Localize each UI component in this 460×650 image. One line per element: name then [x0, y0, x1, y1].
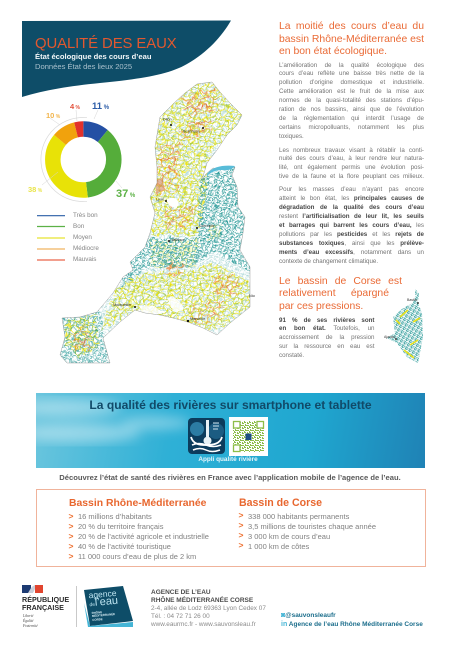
bullet list: > [238, 520, 243, 530]
heading: Rhône-Méditerranée: bassin Rhône-Méditerranée est [279, 34, 424, 45]
address: Tél. : 04 72 71 26 00 [151, 613, 210, 620]
map: Corse: Ajaccio [384, 335, 395, 339]
logo: République Française [22, 585, 69, 628]
logo small text: CORSE [92, 617, 103, 622]
paragraph: main causes: Pour les masses d’eau n’ayant pas encore [279, 186, 424, 193]
paragraph: restoration works: tive de la faune et la flore peuplant ces milieux. [279, 173, 424, 180]
label: 4 percent: 4 % [70, 102, 80, 111]
logo text: del’eau [89, 595, 119, 609]
instagram: ◙@sauvonsleaufr [281, 612, 336, 619]
bullet list: 11 000 cours d’eau de plus de 2 km [78, 552, 196, 561]
legend labels: Mauvais [73, 256, 96, 263]
paragraph: improvement: L’amélioration de la qualité écologique des [279, 62, 424, 68]
icon: Marianne flag [22, 585, 43, 593]
bullet list: 1 000 km de côtes [248, 542, 309, 550]
icon: app [188, 418, 225, 454]
paragraph: restoration works: Les nombreux travaux visant à rétablir la conti- [279, 146, 424, 154]
banner background highlights [36, 396, 192, 446]
paragraph: main causes [279, 186, 424, 265]
divider [76, 586, 77, 627]
linkedin: in Agence de l’eau Rhône Méditerranée Corse [281, 620, 423, 628]
paragraph: main causes: restent l’artificialisation de leur lit, les seuils [279, 213, 424, 220]
column: Rhône-Méditerranée [68, 498, 209, 561]
heading: Corse: par ces pressions. [279, 301, 363, 312]
logo: agence de l'eau [84, 586, 133, 627]
bullet list: 338 000 habitants permanents [248, 512, 349, 520]
map: Rhône-Méditerranée river basin: Besançon [183, 130, 200, 134]
motto [23, 614, 38, 628]
label: 38 percent: 38 % [28, 185, 42, 194]
paragraph: main causes: pollutions par les pesticides et les rejets de [279, 231, 424, 238]
wordmark: FRANÇAISE [22, 603, 64, 612]
label: 11 percent: 11 % [92, 101, 109, 112]
agency name [151, 589, 253, 604]
motto: Liberté [23, 614, 33, 618]
paragraph: main causes: et barrages qui barrent les cours d’eau, les [279, 222, 424, 229]
map: Rhône-Méditerranée river basin: Lyon [156, 198, 164, 202]
legend labels: Très bon [73, 212, 98, 219]
legend labels: Moyen [73, 234, 92, 241]
heading: Corse: Le bassin de Corse est [279, 276, 402, 286]
column: Corse [238, 497, 376, 550]
logo small text: MÉDITERRANÉE [92, 612, 115, 618]
bullet list: 20 % de l’activité agricole et industrielle [78, 532, 209, 541]
map: Rhône-Méditerranée river basin: Montpellier [113, 303, 132, 307]
paragraph: improvement: ration de nos bassins, ainsi que de l’évolution [279, 106, 424, 113]
paragraph: Corse: constaté. [279, 352, 304, 359]
bullet list: > [238, 540, 243, 550]
label: 10 percent: 10 % [46, 110, 60, 120]
legend labels: Bon [73, 223, 84, 230]
agency contact block [151, 589, 266, 628]
bullet list: > [68, 530, 73, 540]
bullet list: > [238, 510, 243, 520]
map: Corse: Bastia [407, 298, 417, 302]
bullet list: > [68, 520, 73, 530]
legend swatches [37, 215, 65, 261]
legend labels [73, 212, 99, 263]
paragraph: Corse [279, 316, 374, 359]
heading: Rhône-Méditerranée [279, 21, 424, 57]
paragraph: improvement: pollution d’origine domestique et industrielle. [279, 79, 424, 86]
key figures panel [36, 489, 426, 567]
logo small text: RHÔNE [92, 610, 102, 615]
paragraph: main causes: substances toxiques, ainsi que les prélève- [279, 240, 424, 247]
heading: Rhône-Méditerranée: La moitié des cours d’eau du [279, 21, 424, 32]
column heading: Bassin de Corse [239, 497, 322, 509]
address: www.eaurmc.fr - www.sauvonsleau.fr [151, 621, 256, 628]
paragraph: improvement: toxiques. [279, 133, 304, 140]
heading: Rhône-Méditerranée: en bon état écologique. [279, 46, 387, 57]
paragraph: improvement: cours d’eau reflète une baisse très nette de la [279, 70, 424, 77]
paragraph: improvement: Cette amélioration est le fruit de la mise aux [279, 88, 424, 95]
paragraph: Corse: sur la ressource en eau est [279, 343, 374, 350]
paragraph: Corse: accroissement de la pression [279, 334, 374, 341]
paragraph: improvement: normes de la quasi-totalité des stations d’épu- [279, 97, 424, 104]
app caption: Appli qualité rivière [198, 456, 258, 463]
address: 2-4, allée de Lodz 69363 Lyon Cedex 07 [151, 605, 266, 612]
bullet list: > [68, 550, 73, 560]
legend [37, 212, 99, 263]
column heading: Bassin Rhône-Méditerranée [69, 498, 206, 509]
bullet list [68, 510, 209, 561]
logo text: agence [88, 588, 117, 600]
paragraph: restoration works: lité, ont également permis une évolution posi- [279, 164, 424, 171]
motto: Fraternité [23, 624, 38, 628]
paragraph: improvement: de la réglementation qui interdit l’usage de [279, 115, 424, 122]
logo shape [84, 586, 133, 627]
paragraph: main causes: ments d’eau excessifs, notamment dans un [279, 249, 424, 256]
subtitle: État écologique des cours d’eau [35, 52, 151, 61]
wordmark: RÉPUBLIQUE [22, 595, 69, 604]
paragraph: main causes: dégradation de la qualité des cours d’eau [279, 204, 424, 211]
paragraph: Corse: en bon état. Toutefois, un [279, 325, 374, 332]
label: 37 percent: 37 % [116, 188, 135, 200]
map: Rhône-Méditerranée river basin: Valence [171, 238, 184, 242]
header banner [22, 20, 231, 97]
social links [281, 612, 423, 628]
paragraph: restoration works [279, 146, 424, 180]
paragraph: restoration works: nuité des cours d’eau, à leur rendre leur natura- [279, 155, 424, 162]
heading: Corse [279, 276, 402, 312]
motto: Égalité [23, 618, 33, 622]
title: QUALITÉ DES EAUX [35, 36, 177, 52]
bullet list [238, 510, 376, 550]
agency name: RHÔNE MÉDITERRANÉE CORSE [151, 597, 253, 604]
map: Rhône-Méditerranée river basin [60, 82, 255, 364]
bullet list: > [68, 540, 73, 550]
map: Corse [384, 290, 423, 363]
map: Rhône-Méditerranée river basin: Dijon [163, 118, 172, 122]
donut chart [40, 110, 122, 202]
bullet list: 3,5 millions de touristes chaque année [248, 522, 376, 530]
address [151, 605, 266, 628]
QR code [229, 417, 268, 456]
paragraph: Corse: 91 % de ses rivières sont [279, 316, 374, 324]
logo small text [92, 610, 115, 622]
heading: Corse: relativement épargné [279, 288, 389, 299]
wordmark [22, 595, 69, 612]
data source line: Données État des lieux 2025 [35, 62, 132, 70]
map: Rhône-Méditerranée river basin: Marseille [190, 317, 205, 321]
bullet list: > [238, 530, 243, 540]
agency name: AGENCE DE L’EAU [151, 589, 211, 596]
paragraph: improvement [279, 62, 424, 140]
bullet list: 3 000 km de cours d’eau [248, 532, 330, 540]
app promotion banner [36, 393, 425, 468]
paragraph: main causes: contexte de changement climatique. [279, 258, 378, 265]
legend labels: Médiocre [73, 245, 99, 252]
banner title: La qualité des rivières sur smartphone et tablette [89, 398, 372, 412]
bullet list: 40 % de l’activité touristique [78, 542, 171, 551]
app description: Découvrez l’état de santé des rivières en France avec l’application mobile de l’agence de l’eau. [59, 472, 401, 482]
logo text [88, 588, 119, 609]
bullet list: 16 millions d’habitants [78, 512, 152, 521]
paragraph: main causes: atteint le bon état, les principales causes de [279, 195, 424, 202]
paragraph: improvement: certains micropolluants, notamment les plus [279, 124, 424, 131]
bullet list: > [68, 510, 73, 520]
bullet list: 20 % du territoire français [78, 522, 163, 531]
map: Rhône-Méditerranée river basin: Grenoble [199, 224, 215, 228]
